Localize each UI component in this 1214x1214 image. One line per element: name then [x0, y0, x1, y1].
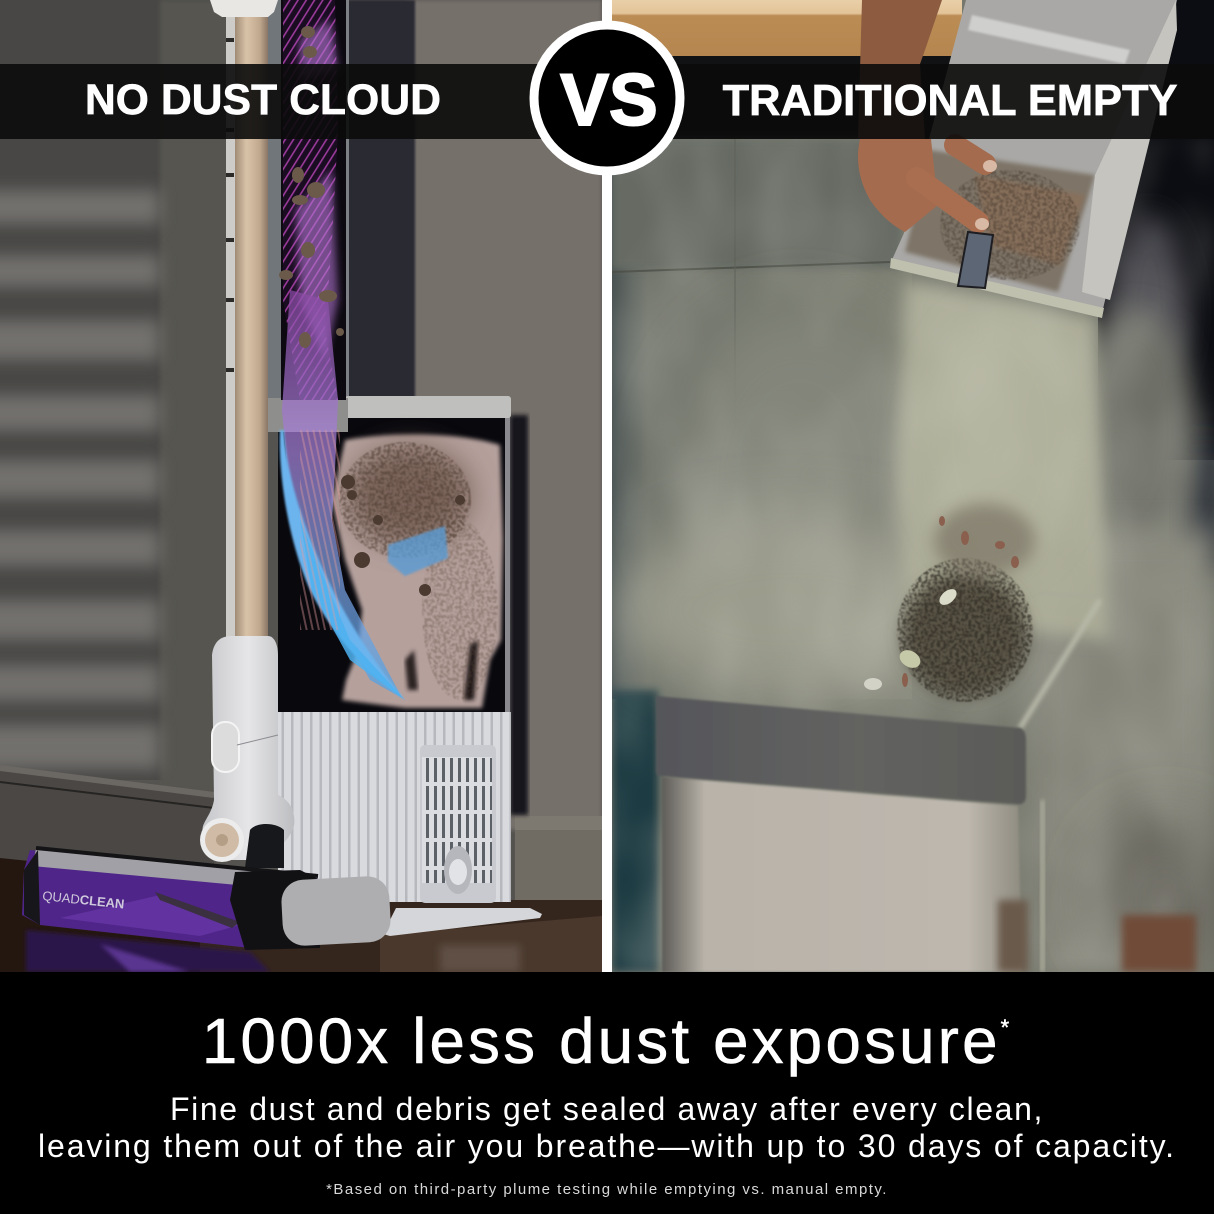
falling debris — [864, 504, 1035, 702]
dust mass inside the bin — [332, 435, 503, 708]
panel: right photo, traditional empty — [612, 0, 1214, 980]
dust bin — [656, 592, 1196, 972]
airflow stream — [279, 0, 465, 700]
blue patch inside dust — [388, 526, 448, 576]
bottom panel — [0, 972, 1214, 1214]
vacuum floor head — [22, 848, 392, 972]
supporting text: leaving them out of the air you breathe—with up to 30 days of capacity. — [38, 1128, 1176, 1164]
header band — [0, 64, 1214, 139]
supporting text — [38, 1091, 1176, 1164]
VS badge — [534, 25, 680, 171]
smoke cloud — [612, 139, 1214, 980]
vacuum floor head: QUADCLEAN — [42, 888, 125, 912]
supporting text: Fine dust and debris get sealed away after every clean, — [170, 1091, 1044, 1127]
vacuum wand — [200, 0, 294, 868]
panel: left photo, no dust cloud dock — [0, 0, 602, 972]
divider — [602, 0, 612, 972]
footnote: *Based on third-party plume testing while emptying vs. manual empty. — [326, 1181, 888, 1198]
heading: no dust cloud: NO DUST CLOUD — [85, 77, 441, 124]
heading: traditional empty: TRADITIONAL EMPTY — [723, 77, 1177, 125]
ribbed dock base — [278, 712, 511, 902]
window blinds reflection — [0, 190, 160, 769]
handheld dust cup and hand — [858, 0, 1177, 318]
main claim: 1000x less dust exposure* — [202, 1005, 1012, 1077]
baseboard and floor — [0, 768, 214, 866]
VS badge: VS — [560, 60, 658, 141]
dock bin — [268, 396, 542, 936]
